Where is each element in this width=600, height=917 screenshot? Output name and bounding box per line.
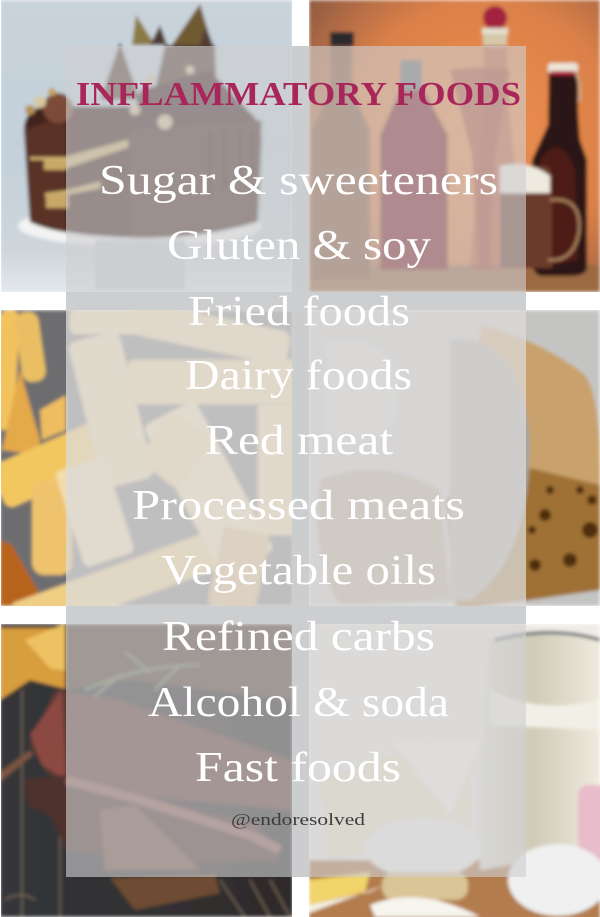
item: alcohol and soda: Alcohol & soda — [148, 680, 449, 726]
photo: sliced steak — [0, 624, 293, 917]
photo: french fries — [1, 310, 292, 606]
item: gluten and soy: Gluten & soy — [167, 223, 431, 269]
item: dairy foods: Dairy foods — [185, 353, 412, 399]
social handle: @endoresolved — [231, 810, 366, 829]
list of inflammatory foods — [99, 158, 498, 791]
title: INFLAMMATORY FOODS — [76, 76, 521, 113]
photo: bottles of alcohol — [309, 0, 600, 292]
item: sugar and sweeteners: Sugar & sweeteners — [99, 158, 498, 204]
item: red meat: Red meat — [205, 418, 393, 464]
photo: dairy products — [309, 624, 600, 917]
item: fried foods: Fried foods — [188, 289, 410, 335]
panel: translucent grey overlay — [66, 46, 526, 877]
photo: sugar piles — [309, 310, 600, 610]
photo: chocolate cake — [0, 0, 293, 293]
item: fast foods: Fast foods — [195, 745, 401, 791]
item: vegetable oils: Vegetable oils — [161, 548, 436, 594]
item: processed meats: Processed meats — [132, 483, 465, 529]
item: refined carbs: Refined carbs — [162, 614, 435, 660]
